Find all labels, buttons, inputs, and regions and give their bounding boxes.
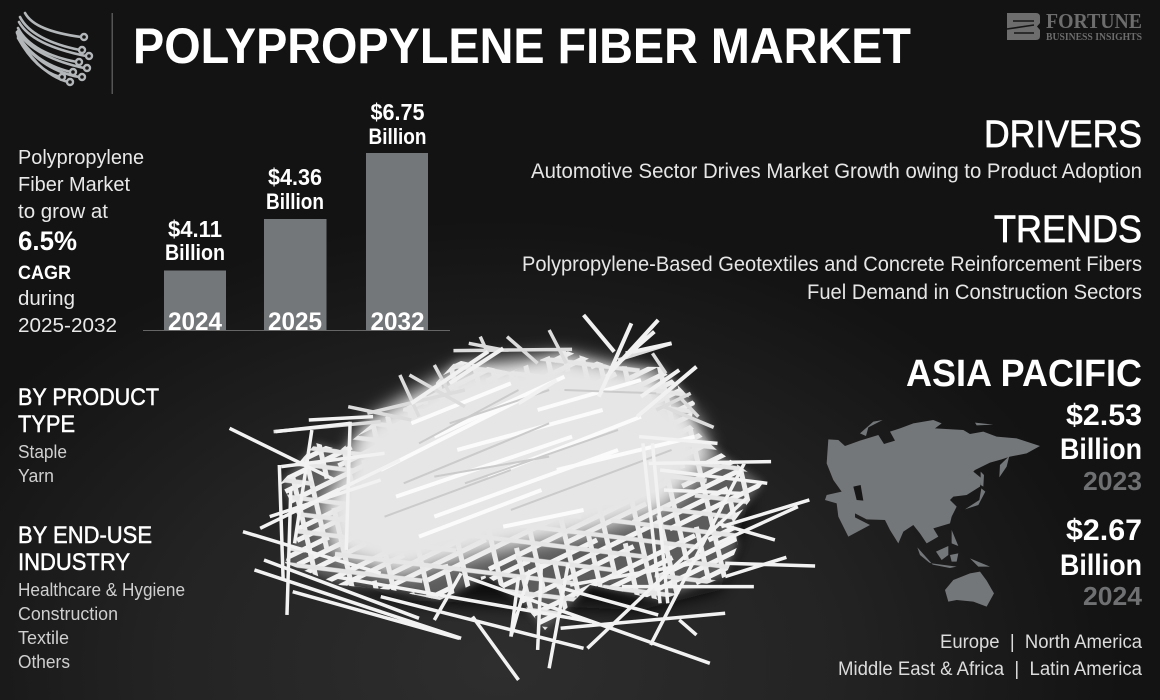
streaks on the mass <box>230 315 815 680</box>
stat: 2023 <box>1060 399 1142 496</box>
text block: CAGR summary: 2025-2032 <box>18 315 117 337</box>
stat: 2024: $2.67 <box>1066 514 1142 547</box>
stat: 2023: 2023 <box>1083 466 1142 496</box>
stat: 2024: Billion <box>1060 549 1142 582</box>
bar: 2024: $4.11 <box>168 216 222 242</box>
title: POLYPROPYLENE FIBER MARKET <box>133 18 911 74</box>
segment list: by product type: Staple <box>18 442 67 462</box>
text block: CAGR summary <box>18 147 144 337</box>
segment list: by end-use industry <box>18 522 185 672</box>
segment list: by product type: BY PRODUCT <box>18 384 159 411</box>
icon: polypropylene fiber strands <box>17 13 92 85</box>
central fiber mass <box>322 355 712 575</box>
panel: drivers: DRIVERS <box>984 114 1142 156</box>
logo: Fortune Business Insights: BUSINESS INSIGHTS <box>1046 32 1142 43</box>
panel: trends: Polypropylene-Based Geotextiles and Concrete Reinforcement Fibers <box>522 253 1142 276</box>
text block: CAGR summary: to grow at <box>18 201 108 223</box>
back and upper fibers <box>274 330 714 432</box>
panel: trends <box>522 209 1142 304</box>
panel: trends: Fuel Demand in Construction Sectors <box>807 281 1142 304</box>
logo: Fortune Business Insights: FORTUNE <box>1046 9 1142 33</box>
panel: Asia Pacific: ASIA PACIFIC <box>906 353 1142 395</box>
bar chart: market size <box>143 99 450 336</box>
panel: Asia Pacific <box>825 353 1143 680</box>
segment list: by end-use industry: Healthcare & Hygiene <box>18 580 185 600</box>
other regions: Middle East & Africa | Latin America <box>838 659 1142 680</box>
bar: 2025: 2025 <box>268 308 322 336</box>
text block: CAGR summary: Polypropylene <box>18 147 144 169</box>
other regions <box>838 632 1142 680</box>
outer and lower fibers <box>230 417 815 680</box>
segment list: by end-use industry: BY END-USE <box>18 522 152 549</box>
segment list: by end-use industry: Construction <box>18 604 118 624</box>
text block: CAGR summary: Fiber Market <box>18 174 130 196</box>
bar: 2032 <box>366 99 428 336</box>
logo: Fortune Business Insights <box>1007 9 1142 43</box>
bar: 2024 <box>164 216 226 336</box>
bar: 2032: 2032 <box>370 308 424 336</box>
bar: 2032: Billion <box>368 124 426 149</box>
segment list: by end-use industry: Others <box>18 652 70 672</box>
stat: 2024: 2024 <box>1083 581 1143 611</box>
map: Asia Pacific <box>825 420 1040 607</box>
text block: CAGR summary: CAGR <box>18 263 71 284</box>
bar: 2032: $6.75 <box>370 99 425 125</box>
other regions: Europe | North America <box>940 632 1142 653</box>
text block: CAGR summary: 6.5% <box>18 226 77 256</box>
fibre texture layers <box>281 350 763 630</box>
stat: 2023: Billion <box>1060 433 1142 466</box>
panel: trends: TRENDS <box>994 209 1142 251</box>
segment list: by product type: TYPE <box>18 411 75 438</box>
text block: CAGR summary: during <box>18 288 75 310</box>
bar: 2025: $4.36 <box>268 164 322 190</box>
stat: 2024 <box>1060 514 1143 611</box>
image: polypropylene fibers pile <box>230 315 815 680</box>
bar: 2024: 2024 <box>168 308 222 336</box>
bar: 2025: Billion <box>266 189 324 214</box>
stat: 2023: $2.53 <box>1066 399 1142 432</box>
bar: 2024: Billion <box>165 240 225 265</box>
segment list: by product type: Yarn <box>18 466 54 486</box>
segment list: by product type <box>18 384 159 486</box>
segment list: by end-use industry: INDUSTRY <box>18 549 130 576</box>
panel: drivers <box>531 114 1142 183</box>
segment list: by end-use industry: Textile <box>18 628 69 648</box>
bar: 2025 <box>264 164 326 336</box>
shadow under the pile <box>300 400 750 610</box>
panel: drivers: Automotive Sector Drives Market Growth owing to Product Adoption <box>531 160 1142 183</box>
